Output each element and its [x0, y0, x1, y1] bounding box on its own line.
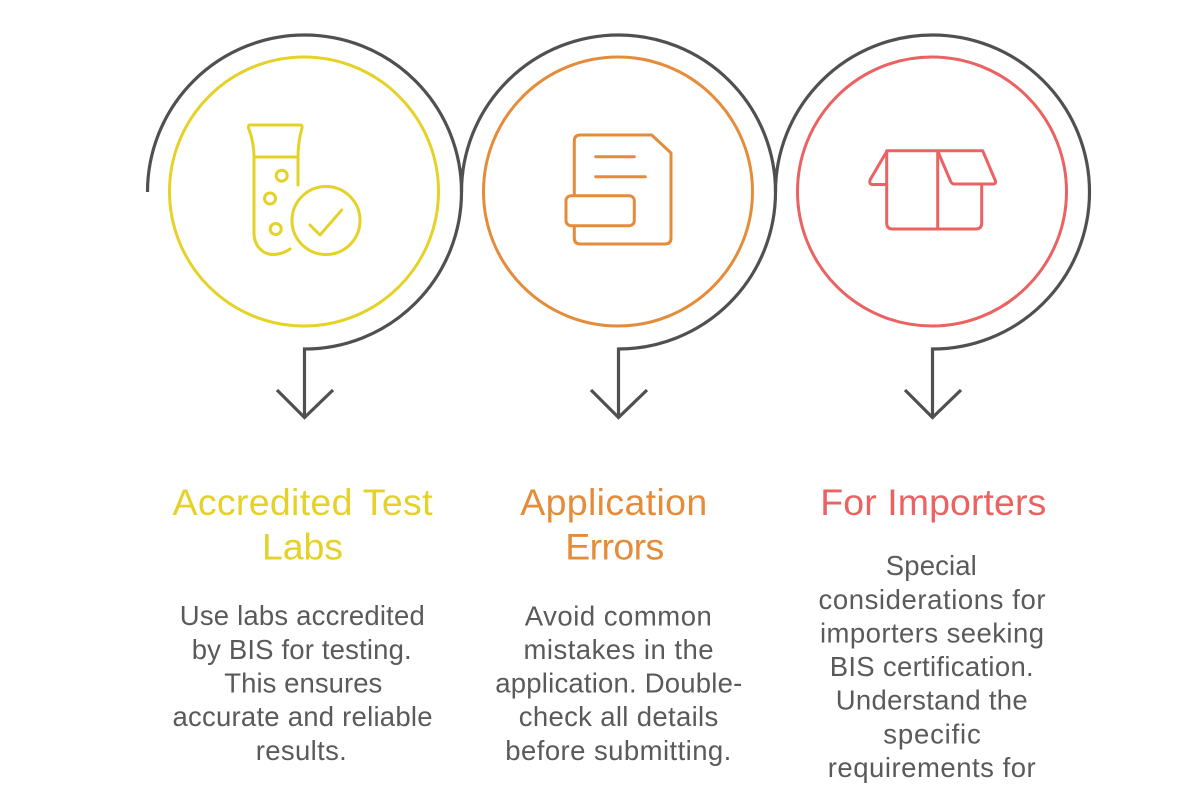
- text: application errors description: Avoid common: [525, 600, 712, 632]
- text: for importers description: BIS certification.: [830, 651, 1034, 682]
- icon: open box: [870, 151, 996, 229]
- heading: application errors: [520, 481, 707, 568]
- text: application errors description: before submitting.: [505, 735, 731, 766]
- circle: for importers: [798, 57, 1066, 326]
- text: application errors description: mistakes in the: [524, 634, 714, 665]
- text: for importers description: considerations for: [818, 584, 1046, 615]
- heading: for importers: For Importers: [820, 481, 1046, 523]
- heading: accredited test labs: Labs: [262, 526, 343, 568]
- heading: accredited test labs: Accredited Test: [172, 481, 433, 523]
- icon: document with form field: [566, 135, 671, 244]
- heading: application errors: Application: [520, 481, 707, 523]
- text: accredited test labs description: results.: [256, 735, 347, 766]
- text: for importers description: Understand the: [836, 684, 1028, 716]
- text: for importers description: requirements for: [828, 752, 1036, 783]
- heading: accredited test labs: [172, 481, 433, 568]
- circle: accredited test labs: [170, 57, 438, 326]
- text: for importers description: Special: [886, 550, 977, 581]
- text: for importers description: [818, 550, 1046, 783]
- arrow 1: circular arc with down arrow: [148, 35, 461, 418]
- text: application errors description: check all details: [519, 701, 718, 732]
- heading: application errors: Errors: [565, 526, 664, 568]
- text: accredited test labs description: by BIS for testing.: [192, 634, 412, 665]
- arrow 3: circular arc with down arrow: [776, 35, 1090, 418]
- text: accredited test labs description: This ensures: [224, 668, 382, 699]
- text: for importers description: specific: [883, 718, 981, 750]
- text: for importers description: importers seeking: [820, 618, 1044, 648]
- arrow 2: circular arc with down arrow: [462, 35, 776, 418]
- text: accredited test labs description: Use labs accredited: [180, 600, 425, 631]
- circle: application errors: [484, 57, 752, 326]
- text: application errors description: [495, 600, 742, 766]
- text: accredited test labs description: [172, 600, 432, 766]
- text: application errors description: application. Double-: [495, 668, 742, 699]
- icon: test tube with check mark: [248, 125, 360, 254]
- text: accredited test labs description: accurate and reliable: [172, 701, 432, 732]
